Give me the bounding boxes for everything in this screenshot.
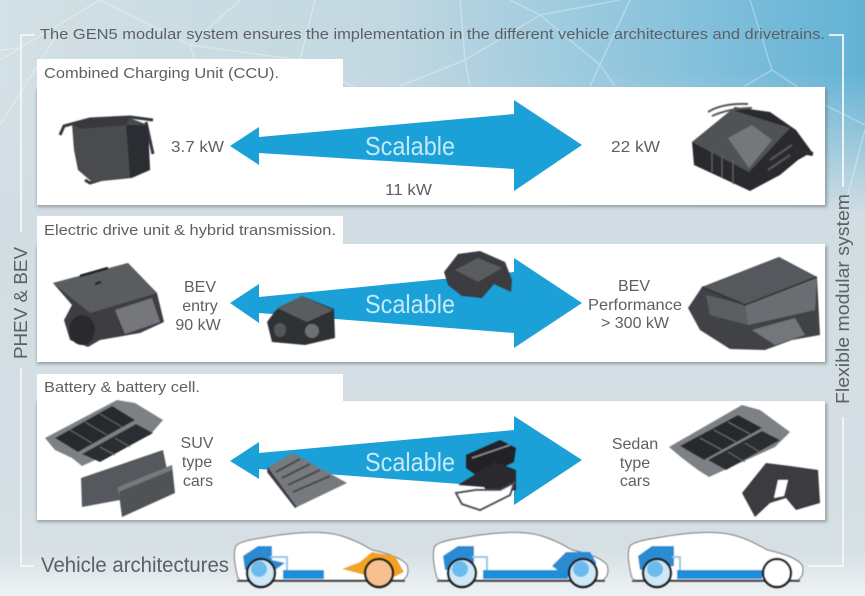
panel: battery <box>37 374 827 522</box>
label: 3.7 kW: 3.7 kW <box>171 139 225 156</box>
side label: flexible modular system: Flexible modular system <box>832 194 853 404</box>
label: Sedan type cars: type <box>620 455 650 472</box>
label: BEV entry: 90 kW <box>175 317 222 334</box>
label: BEV entry: entry <box>182 298 218 315</box>
label: SUV type cars: type <box>182 454 212 471</box>
label: vehicle architectures: Vehicle architectures <box>41 554 229 577</box>
heading: battery: Battery & battery cell. <box>44 379 200 396</box>
arrow: charging scalable <box>230 100 582 191</box>
heading: electric drive unit: Electric drive unit & hybrid transmission. <box>44 222 336 239</box>
car: dual motor <box>433 533 608 587</box>
icon: mid drive unit <box>267 296 335 345</box>
label: SUV type cars: cars <box>183 473 213 490</box>
car: rear and front motor <box>234 533 408 587</box>
panel: electric drive unit <box>37 216 827 364</box>
label: 11 kW: 11 kW <box>385 182 433 199</box>
label: Sedan type cars: Sedan <box>612 436 658 453</box>
icon: entry drive unit <box>53 263 164 347</box>
title: The GEN5 modular system ensures the implementation in the different vehicle architectures and drivetrains. <box>40 26 825 43</box>
bracket: right <box>808 35 843 566</box>
icon: mid battery module <box>267 453 347 508</box>
arrow: charging scalable: Scalable <box>365 131 455 161</box>
arrow: battery scalable <box>230 416 582 505</box>
label: 22 kW: 22 kW <box>611 139 661 156</box>
arrow: drive scalable <box>230 258 582 348</box>
arrow: battery scalable: Scalable <box>365 447 455 477</box>
icon: cell stack <box>456 440 516 510</box>
label: SUV type cars <box>181 435 214 490</box>
label: Sedan type cars: cars <box>620 473 650 490</box>
icon: battery cells <box>81 450 175 517</box>
label: BEV entry: BEV <box>184 279 216 296</box>
icon: large charging unit <box>692 104 813 191</box>
bracket: left <box>21 35 35 566</box>
icon: sedan cooling module <box>742 463 820 517</box>
label: BEV performance: BEV <box>618 278 650 295</box>
label: BEV entry <box>175 279 222 334</box>
label: Sedan type cars <box>612 436 658 490</box>
panel: combined charging unit <box>37 59 827 207</box>
label: BEV performance: > 300 kW <box>601 315 670 332</box>
icon: performance drive unit <box>688 257 820 350</box>
arrow: drive scalable: Scalable <box>365 289 455 319</box>
side label: PHEV and BEV: PHEV & BEV <box>10 246 31 359</box>
icon: sedan battery pack <box>669 405 790 477</box>
label: SUV type cars: SUV <box>181 435 214 452</box>
label: BEV performance <box>588 278 682 332</box>
heading: combined charging unit: Combined Charging Unit (CCU). <box>44 65 279 82</box>
icon: small charging unit <box>60 117 153 183</box>
car: single motor <box>628 533 803 587</box>
icon: small upper drive unit <box>444 251 512 298</box>
icon: SUV battery pack <box>45 400 163 466</box>
label: BEV performance: Performance <box>588 297 682 314</box>
